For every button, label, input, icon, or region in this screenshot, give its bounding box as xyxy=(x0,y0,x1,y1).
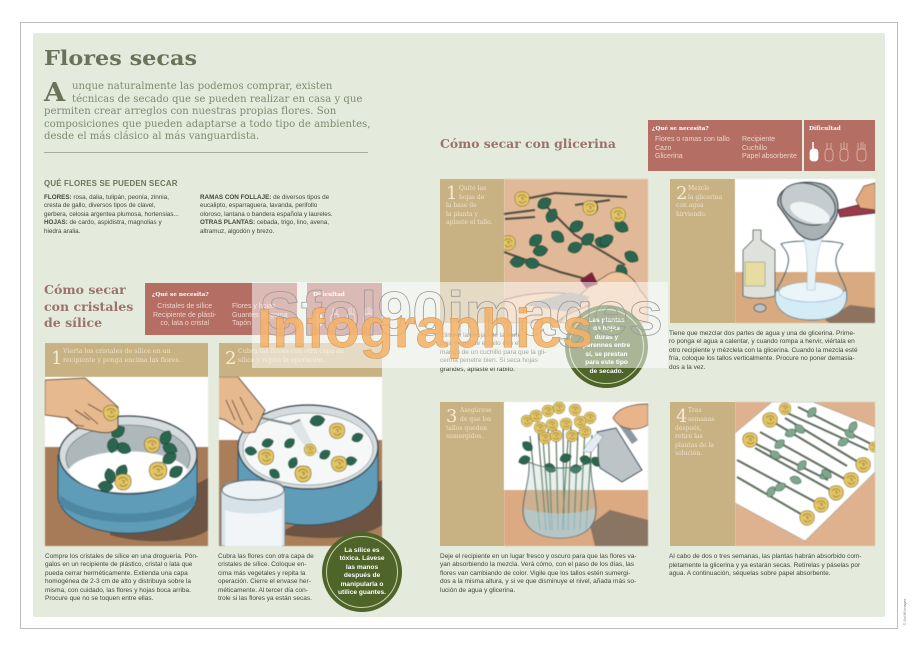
illustration: covering roses xyxy=(218,376,383,547)
box: materials silica: Recipiente de plásti- xyxy=(153,312,216,319)
text step 2 silica: trole si las flores ya están secas. xyxy=(218,595,312,602)
step 1 glycerin xyxy=(440,178,648,324)
text step 1 glycerin: mango de un cuchillo para que la gli- xyxy=(440,349,546,356)
step 2 tan column: la glicerina xyxy=(688,194,722,200)
box: difficulty silica xyxy=(307,283,382,335)
step 2 header: 2 xyxy=(225,348,236,369)
section heading: QUÉ FLORES SE PUEDEN SECAR xyxy=(44,179,178,188)
callout text: utilice guantes. xyxy=(338,589,386,596)
left column: HOJAS: de cardo, aspidistra, magnolias y xyxy=(44,219,162,226)
step 1 header: 1 xyxy=(51,348,62,369)
callout text: Las plantas xyxy=(588,316,625,324)
step 4 tan column: Tras xyxy=(688,407,702,414)
step 4 tan column: 4 xyxy=(676,406,687,427)
callout text: de secado. xyxy=(589,368,624,375)
step 2 tan column: con agua xyxy=(676,202,704,209)
text step 1 silica: homogénea de 2-3 cm de alto y distribuya sobre la xyxy=(45,578,191,585)
text step 1 silica: Procure que no se toquen entre ellas. xyxy=(45,595,153,602)
box: materials glycerin: Flores o ramas con tallo xyxy=(655,136,730,143)
callout: silica is toxic xyxy=(322,532,402,612)
watermark strip xyxy=(252,282,668,368)
box: materials glycerin: ¿Qué se necesita? xyxy=(652,126,709,132)
text step 1 silica xyxy=(45,552,198,602)
box: materials glycerin: Recipiente xyxy=(742,136,775,143)
step 3 tan column: 3 xyxy=(446,406,457,427)
step 1 tan column: la planta y xyxy=(446,210,478,218)
right column: altramuz, algodón y brezo. xyxy=(200,228,274,234)
illustration: vase and pitcher xyxy=(503,401,649,547)
text step 1 silica: misma, con cuidado, las flores y hojas boca arriba. xyxy=(45,587,191,594)
step 1 tan column: aplaste el tallo. xyxy=(446,219,492,226)
divider xyxy=(44,152,368,153)
text step 1 glycerin xyxy=(440,332,546,373)
step 1 silica xyxy=(44,343,209,547)
step 2 glycerin xyxy=(670,178,876,324)
heading: silica method: con cristales xyxy=(44,298,133,314)
text step 2 silica: méticamente. Al tercer día con- xyxy=(218,587,308,594)
step 4 tan column: retire las xyxy=(675,433,703,440)
callout text: sí, se prestan xyxy=(585,351,628,358)
text step 1 glycerin: grandes, aplaste el rabito. xyxy=(440,366,515,373)
callout ring xyxy=(326,536,398,608)
text step 2 silica: Cubra las flores con otra capa de xyxy=(218,552,314,560)
callout text: de hojas xyxy=(593,325,620,332)
text step 4 glycerin: pletamente la glicerina y ya estarán secas. Retírelas y páselas por xyxy=(669,562,860,568)
text step 2 silica xyxy=(218,552,314,602)
right column xyxy=(200,194,333,234)
heading: silica method: de sílice xyxy=(44,315,102,330)
right column: oloroso, lantana o bandera española y laureles. xyxy=(200,210,333,218)
text step 3 glycerin: Deje el recipiente en un lugar fresco y oscuro para que las flores va- xyxy=(440,552,637,560)
box: materials glycerin: Cuchillo xyxy=(742,145,767,152)
step 1 header: Vierta los cristales de sílice en un xyxy=(63,348,171,355)
text step 1 glycerin: baja y aplaste el tallo con el xyxy=(440,340,520,347)
box: materials silica: Cristales de sílice xyxy=(157,303,212,310)
credit: © Sol 90 Images xyxy=(903,599,907,625)
step 3 glycerin xyxy=(440,401,649,547)
step 1 tan column: la base de xyxy=(446,202,477,209)
step 2 tan column: 2 xyxy=(676,183,687,204)
left column xyxy=(44,194,179,234)
callout text: duras y xyxy=(595,334,618,341)
step 2 header xyxy=(219,343,382,377)
box: materials glycerin: Papel absorbente xyxy=(742,153,797,160)
heading: silica method: Cómo secar xyxy=(44,282,126,297)
text step 2 glycerin xyxy=(669,330,858,370)
text step 1 glycerin: cerina penetre bien. Si seca hojas xyxy=(440,357,538,364)
box: materials silica: Guantes de goma xyxy=(232,312,288,319)
step 3 tan column: tallos queden xyxy=(446,424,487,432)
callout text: después de xyxy=(344,572,380,579)
step 2 header: sílice y repita la operación. xyxy=(238,357,325,364)
box: materials silica: Flores y hojas xyxy=(232,303,276,310)
intro text: técnicas de secado que se pueden realizar en casa y que xyxy=(72,94,362,104)
right column: RAMAS CON FOLLAJE: de diversos tipos de xyxy=(200,194,329,200)
intro text: A xyxy=(44,78,65,108)
text step 4 glycerin: agua. A continuación, séquelas sobre papel absorbente. xyxy=(669,570,831,577)
step 2 tan column xyxy=(670,179,735,323)
step 4 tan column: solución. xyxy=(675,450,702,457)
step 3 tan column xyxy=(440,402,504,546)
intro text: unque naturalmente las podemos comprar, existen xyxy=(72,81,332,92)
right column: eucalipto, esparraguera, lavanda, perifollo xyxy=(200,202,317,209)
text step 4 glycerin xyxy=(669,553,862,577)
text step 4 glycerin: Al cabo de dos o tres semanas, las plantas habrán absorbido com- xyxy=(669,553,862,560)
title: Flores secas xyxy=(44,46,197,70)
intro text: desde el más clásico al más vanguardista. xyxy=(44,131,259,142)
illustration: drying on paper xyxy=(734,402,876,546)
callout text: La sílice es xyxy=(344,546,380,554)
step 4 tan column: semanas xyxy=(688,416,714,422)
illustration: roses in tin xyxy=(44,376,209,547)
box: difficulty silica: Dificultad xyxy=(313,292,345,298)
text step 2 glycerin: otro recipiente y mézclela con la glicerina. Cuando la mezcla esté xyxy=(669,346,858,354)
text step 3 glycerin: lución de agua y glicerina. xyxy=(440,586,515,594)
step 3 tan column: sumergidos. xyxy=(446,433,483,440)
box: difficulty glycerin: Dificultad xyxy=(809,126,841,132)
callout text: manipularla o xyxy=(341,581,383,588)
text step 2 glycerin: fría, coloque los tallos verticalmente. Procure no poner demasia- xyxy=(669,355,855,362)
box: materials silica: co, lata o cristal xyxy=(160,320,209,327)
callout text: tóxica. Lávese xyxy=(339,555,385,562)
box: materials glycerin: Cazo xyxy=(655,145,671,152)
illustration: stripping leaves xyxy=(503,178,648,324)
watermark text: Sfol90images xyxy=(259,280,663,349)
left column: hiedra aralia. xyxy=(44,228,80,234)
text step 1 glycerin: Elimine las hojas de la parte xyxy=(440,332,521,338)
intro text xyxy=(44,78,370,142)
box: materials silica xyxy=(145,283,297,335)
right column: OTRAS PLANTAS: cebada, trigo, lino, avena, xyxy=(200,219,329,226)
callout: glycerin plants xyxy=(565,305,648,388)
text step 2 glycerin: dos a la vez. xyxy=(669,364,706,370)
box: materials silica: ¿Qué se necesita? xyxy=(152,292,209,298)
watermark text: Infographics xyxy=(257,297,593,359)
step 1 header: recipiente y ponga encima las flores. xyxy=(63,357,181,364)
callout text xyxy=(583,316,630,375)
step 2 tan column: Mezcle xyxy=(688,185,710,192)
step 1 tan column: 1 xyxy=(446,183,457,204)
step 3 tan column: de que los xyxy=(460,416,491,422)
step 1 header xyxy=(45,343,208,377)
callout text: las manos xyxy=(346,564,378,571)
text step 2 silica: operación. Cierre el envase her- xyxy=(218,578,311,585)
intro text: permiten crear arreglos con nuestras propias flores. Son xyxy=(44,106,336,117)
text step 2 glycerin: ro ponga el agua a calentar, y cuando rompa a hervir, viértala en xyxy=(669,338,855,345)
callout text: para este tipo xyxy=(585,359,628,366)
step 4 tan column: después, xyxy=(675,424,702,432)
step 4 tan column: plantas de la xyxy=(675,442,714,448)
box: materials glycerin: Glicerina xyxy=(655,153,683,160)
step 1 tan column: Quite las xyxy=(459,185,486,192)
heading: glycerin method: Cómo secar con glicerina xyxy=(440,136,616,151)
section: which flowers xyxy=(44,178,333,234)
step 1 tan column xyxy=(440,179,504,323)
text step 2 glycerin: Tiene que mezclar dos partes de agua y una de glicerina. Prime- xyxy=(669,330,855,336)
text step 1 silica: Compre los cristales de sílice en una droguería. Pón- xyxy=(45,552,198,560)
left column: FLORES: rosa, dalia, tulipán, peonía, zinnia, xyxy=(44,194,169,200)
callout text: perennes entre xyxy=(583,342,630,349)
box: materials silica: Tapón xyxy=(232,320,251,327)
left column: cresta de gallo, diversos tipos de clavel, xyxy=(44,202,155,209)
step 2 tan column: hirviendo. xyxy=(676,210,707,218)
step 1 tan column: hojas de xyxy=(459,194,484,200)
text step 1 silica: pueda cerrar herméticamente. Extienda una capa xyxy=(45,570,188,577)
text step 2 silica: cristales de sílice. Coloque en- xyxy=(218,561,307,568)
callout ring xyxy=(569,309,644,384)
box: difficulty glycerin xyxy=(804,120,875,171)
text step 3 glycerin: flores van cambiando de color. Vigile que los tallos estén sumergi- xyxy=(440,570,630,576)
intro text: composiciones que pueden adaptarse a todo tipo de ambientes, xyxy=(44,118,370,130)
step 4 tan column xyxy=(670,402,735,546)
step 4 glycerin xyxy=(670,402,876,546)
text step 3 glycerin xyxy=(440,552,637,594)
step 2 silica xyxy=(218,343,383,547)
text step 2 silica: cima más vegetales y repita la xyxy=(218,570,305,577)
box: materials glycerin xyxy=(648,120,802,171)
heading: silica method xyxy=(44,282,133,330)
illustration: mixing xyxy=(734,178,876,324)
callout text xyxy=(338,546,386,596)
text step 3 glycerin: yan absorbiendo la mezcla. Verá cómo, con el paso de los días, las xyxy=(440,561,634,568)
step 2 header: Cubra las flores con otra capa de xyxy=(238,348,344,355)
text step 3 glycerin: dos a la misma altura, y si ve que disminuye el nivel, añada más so- xyxy=(440,578,636,585)
text step 1 silica: galos en un recipiente de plástico, cristal o lata que xyxy=(45,561,192,568)
left column: gerbera, celosia argentea plumosa, hortensias... xyxy=(44,210,179,218)
step 3 tan column: Asegúrese xyxy=(460,407,492,414)
